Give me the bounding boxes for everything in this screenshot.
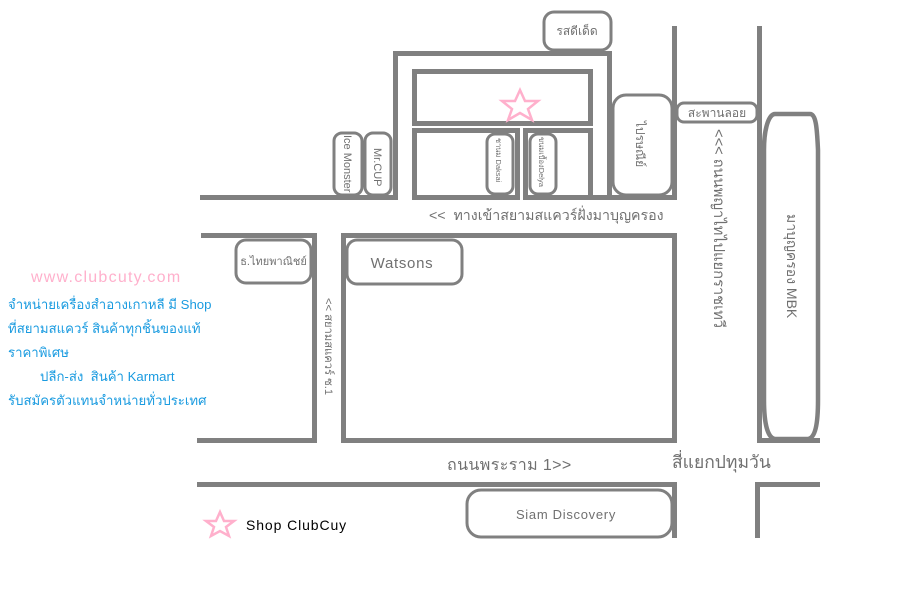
label: MBK: มาบุญครอง MBK: [783, 214, 800, 319]
Siam Square lower right block: [526, 130, 590, 198]
road label: Rama 1: ถนนพระราม 1>>: [447, 457, 572, 474]
shop description: ปลีก-ส่ง สินค้า Karmart: [40, 369, 175, 384]
shop description: จำหน่ายเครื่องสำอางเกาหลี มี Shop: [8, 295, 211, 312]
label: Daksai: ชานม Daksai: [494, 138, 503, 183]
label: Mr.CUP: [365, 133, 391, 195]
label: Thai Commercial Bank: ธ.ไทยพาณิชย์: [240, 255, 307, 268]
label: Skywalk: สะพานลอย: [688, 106, 746, 120]
label: Rosdee: รสดีเด็ด: [556, 23, 598, 38]
road label: Siam Square entrance: << ทางเข้าสยามสแควร์ฝั่งมาบุญครอง: [429, 205, 664, 224]
label: Mr.CUP: Mr.CUP: [371, 148, 383, 186]
label: Daksai: [487, 134, 513, 194]
label: Siam Discovery: [467, 490, 672, 537]
label: Siam Discovery: Siam Discovery: [516, 507, 616, 522]
Siam Square lower left block: [414, 130, 518, 198]
label: MBK: [764, 114, 818, 439]
shop description: ราคาพิเศษ: [8, 345, 69, 360]
website heading: www.clubcuty.com: [30, 269, 181, 286]
shop description: รับสมัครตัวแทนจำหน่ายทั่วประเทศ: [8, 391, 207, 408]
map roads and blocks: [197, 26, 820, 538]
label: Skywalk: [677, 103, 757, 122]
label: Pathumwan building: [613, 95, 672, 195]
label: Ice Monster: [334, 133, 362, 195]
shop star marker: [502, 90, 538, 120]
road label: Phaya Thai: <<< ถนนพญาไทไปแยกราชเทวี: [710, 129, 728, 328]
shop description: [8, 295, 211, 408]
label: Watsons: Watsons: [371, 255, 433, 272]
Siam Square upper block: [414, 72, 590, 124]
legend: shop star: [206, 512, 347, 536]
road label: Siam Square Soi 1: << สยามสแควร์ ซ.1: [322, 298, 335, 395]
label: Pathumwan building: ไปรษณีย์: [633, 120, 647, 167]
label: Delya: [530, 134, 556, 194]
shop description: ที่สยามสแควร์ สินค้าทุกชิ้นของแท้: [8, 319, 201, 337]
junction label: Pathumwan: สี่แยกปทุมวัน: [672, 450, 771, 473]
label: Rosdee: [544, 12, 611, 50]
label: Delya: ขนมเบื้องDelya: [537, 137, 547, 188]
label: Ice Monster: Ice Monster: [341, 135, 353, 193]
legend: shop star: Shop ClubCuy: [246, 517, 347, 533]
label: Thai Commercial Bank: [236, 240, 311, 283]
label: Watsons: [347, 240, 462, 284]
